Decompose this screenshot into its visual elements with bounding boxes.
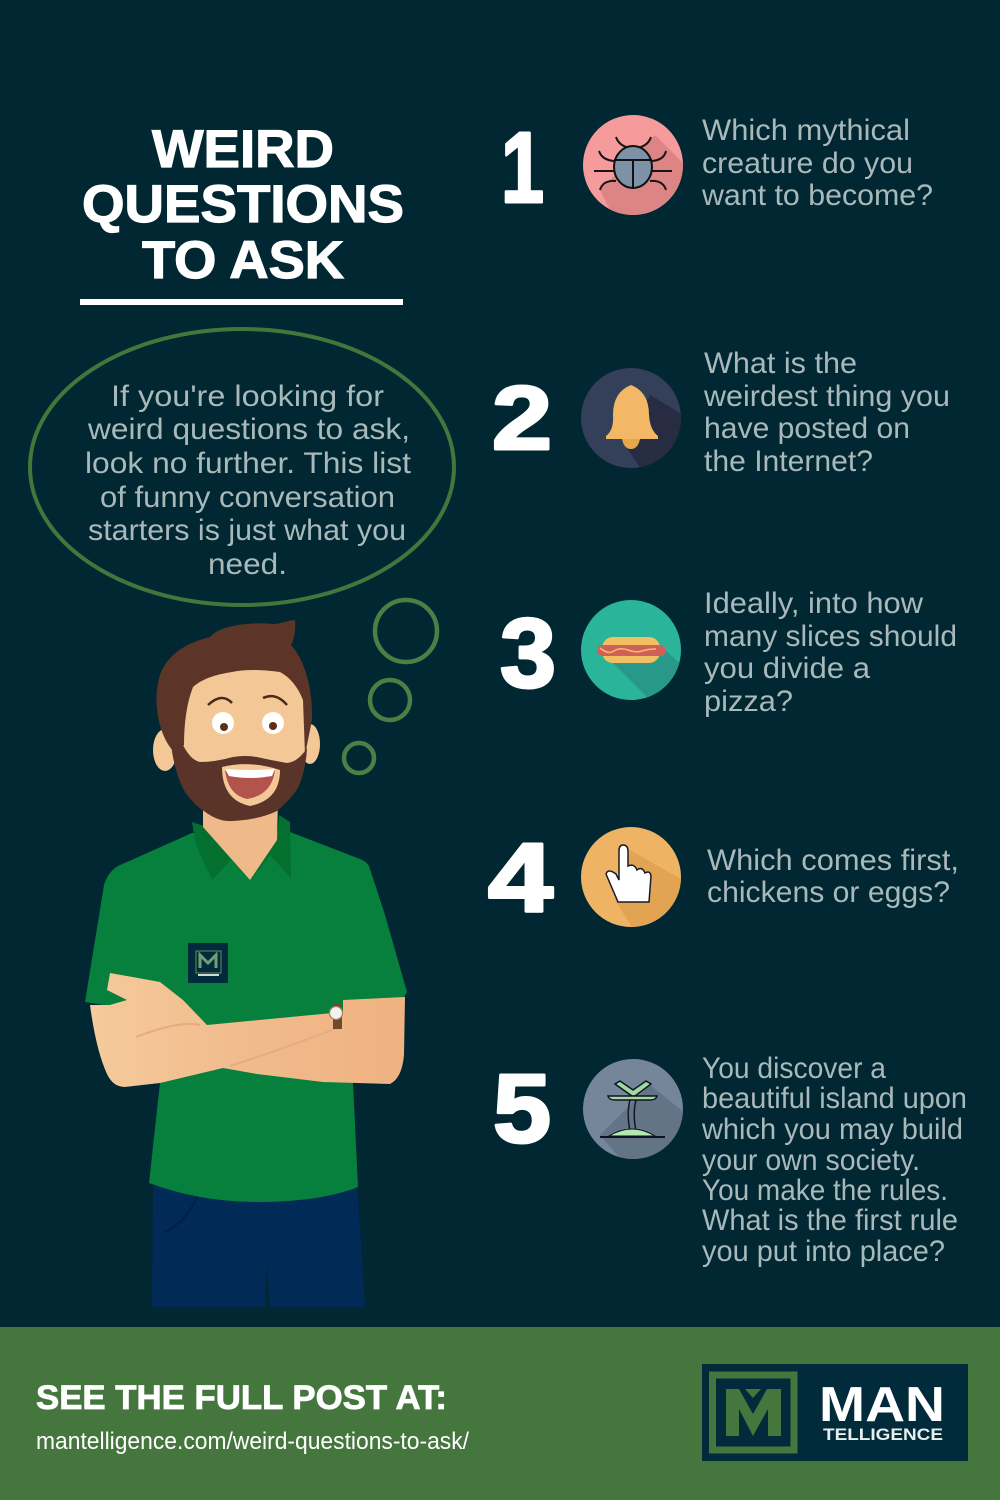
title: TO ASK [142, 231, 344, 290]
question text 4: chickens or eggs? [707, 876, 950, 909]
title: QUESTIONS [82, 175, 404, 234]
face [182, 668, 306, 790]
logo: Mantelligence [702, 1364, 968, 1461]
title: WEIRD [152, 120, 334, 179]
ears [153, 724, 320, 771]
speech bubble: intro: If you're looking for [111, 380, 384, 413]
question text 4: Which comes first, [707, 844, 959, 877]
eyes and brows [208, 696, 287, 734]
polo shirt [85, 815, 407, 1202]
question text 5: you put into place? [702, 1235, 945, 1268]
icon: palm island [583, 1059, 683, 1159]
logo: Mantelligence: MAN [819, 1378, 945, 1432]
speech bubble: intro: look no further. This list [85, 447, 412, 480]
question text 3: pizza? [704, 685, 793, 718]
number 1: 1 [501, 112, 544, 224]
speech bubble: intro: of funny conversation [100, 481, 395, 514]
footer call to action: SEE THE FULL POST AT: [36, 1379, 447, 1417]
question text 5: You make the rules. [702, 1174, 948, 1207]
question text 1: Which mythical [702, 114, 910, 147]
question text 3: Ideally, into how [704, 587, 923, 620]
number 3: 3 [500, 598, 556, 708]
icon: pointing hand [581, 827, 681, 927]
icon: bell [581, 368, 681, 468]
speech bubble: intro: need. [208, 548, 287, 581]
icon: bug [583, 115, 683, 215]
question text 3: you divide a [704, 652, 870, 685]
mouth [222, 764, 280, 806]
speech bubble: intro [30, 329, 454, 605]
arms [90, 973, 405, 1087]
speech bubble: intro: starters is just what you [88, 514, 406, 547]
speech bubble: intro: weird questions to ask, [87, 413, 410, 446]
question 3 [500, 587, 957, 720]
question text 2: weirdest thing you [703, 380, 950, 413]
question text 5: What is the first rule [702, 1204, 958, 1237]
question text 1: want to become? [701, 179, 933, 212]
question text 1: creature do you [702, 147, 913, 180]
hair [156, 620, 312, 755]
question text 2: What is the [704, 347, 857, 380]
beard [171, 743, 307, 821]
title [80, 120, 404, 305]
character: bearded man with crossed arms [85, 620, 407, 1307]
question text 2: have posted on [704, 412, 910, 445]
question text 5: You discover a [702, 1052, 886, 1085]
question text 5: your own society. [702, 1144, 920, 1177]
question text 4 [707, 844, 959, 909]
question 5 [493, 1052, 967, 1268]
footer url: mantelligence.com/weird-questions-to-ask/ [36, 1428, 469, 1455]
question 2 [494, 352, 948, 472]
question text 2: the Internet? [704, 445, 873, 478]
question text 5 [701, 1052, 967, 1268]
watch [330, 1004, 342, 1029]
question text 5: which you may build [701, 1113, 963, 1146]
question text 3: many slices should [704, 620, 957, 653]
question text 5: beautiful island upon [702, 1082, 967, 1115]
shirt badge [188, 943, 228, 983]
number 2: 2 [492, 369, 552, 469]
number 5: 5 [493, 1054, 551, 1163]
neck [203, 800, 278, 880]
trousers [152, 1180, 365, 1307]
question text 2 [703, 347, 950, 478]
number 4: 4 [488, 823, 553, 932]
logo: Mantelligence: TELLIGENCE [823, 1426, 943, 1444]
question 1 [504, 115, 932, 215]
question text 3 [704, 587, 957, 718]
icon: hot dog [581, 600, 681, 700]
question 4 [488, 827, 956, 927]
question text 1 [701, 114, 933, 212]
footer band [0, 1327, 1000, 1500]
thought bubbles [344, 600, 437, 773]
